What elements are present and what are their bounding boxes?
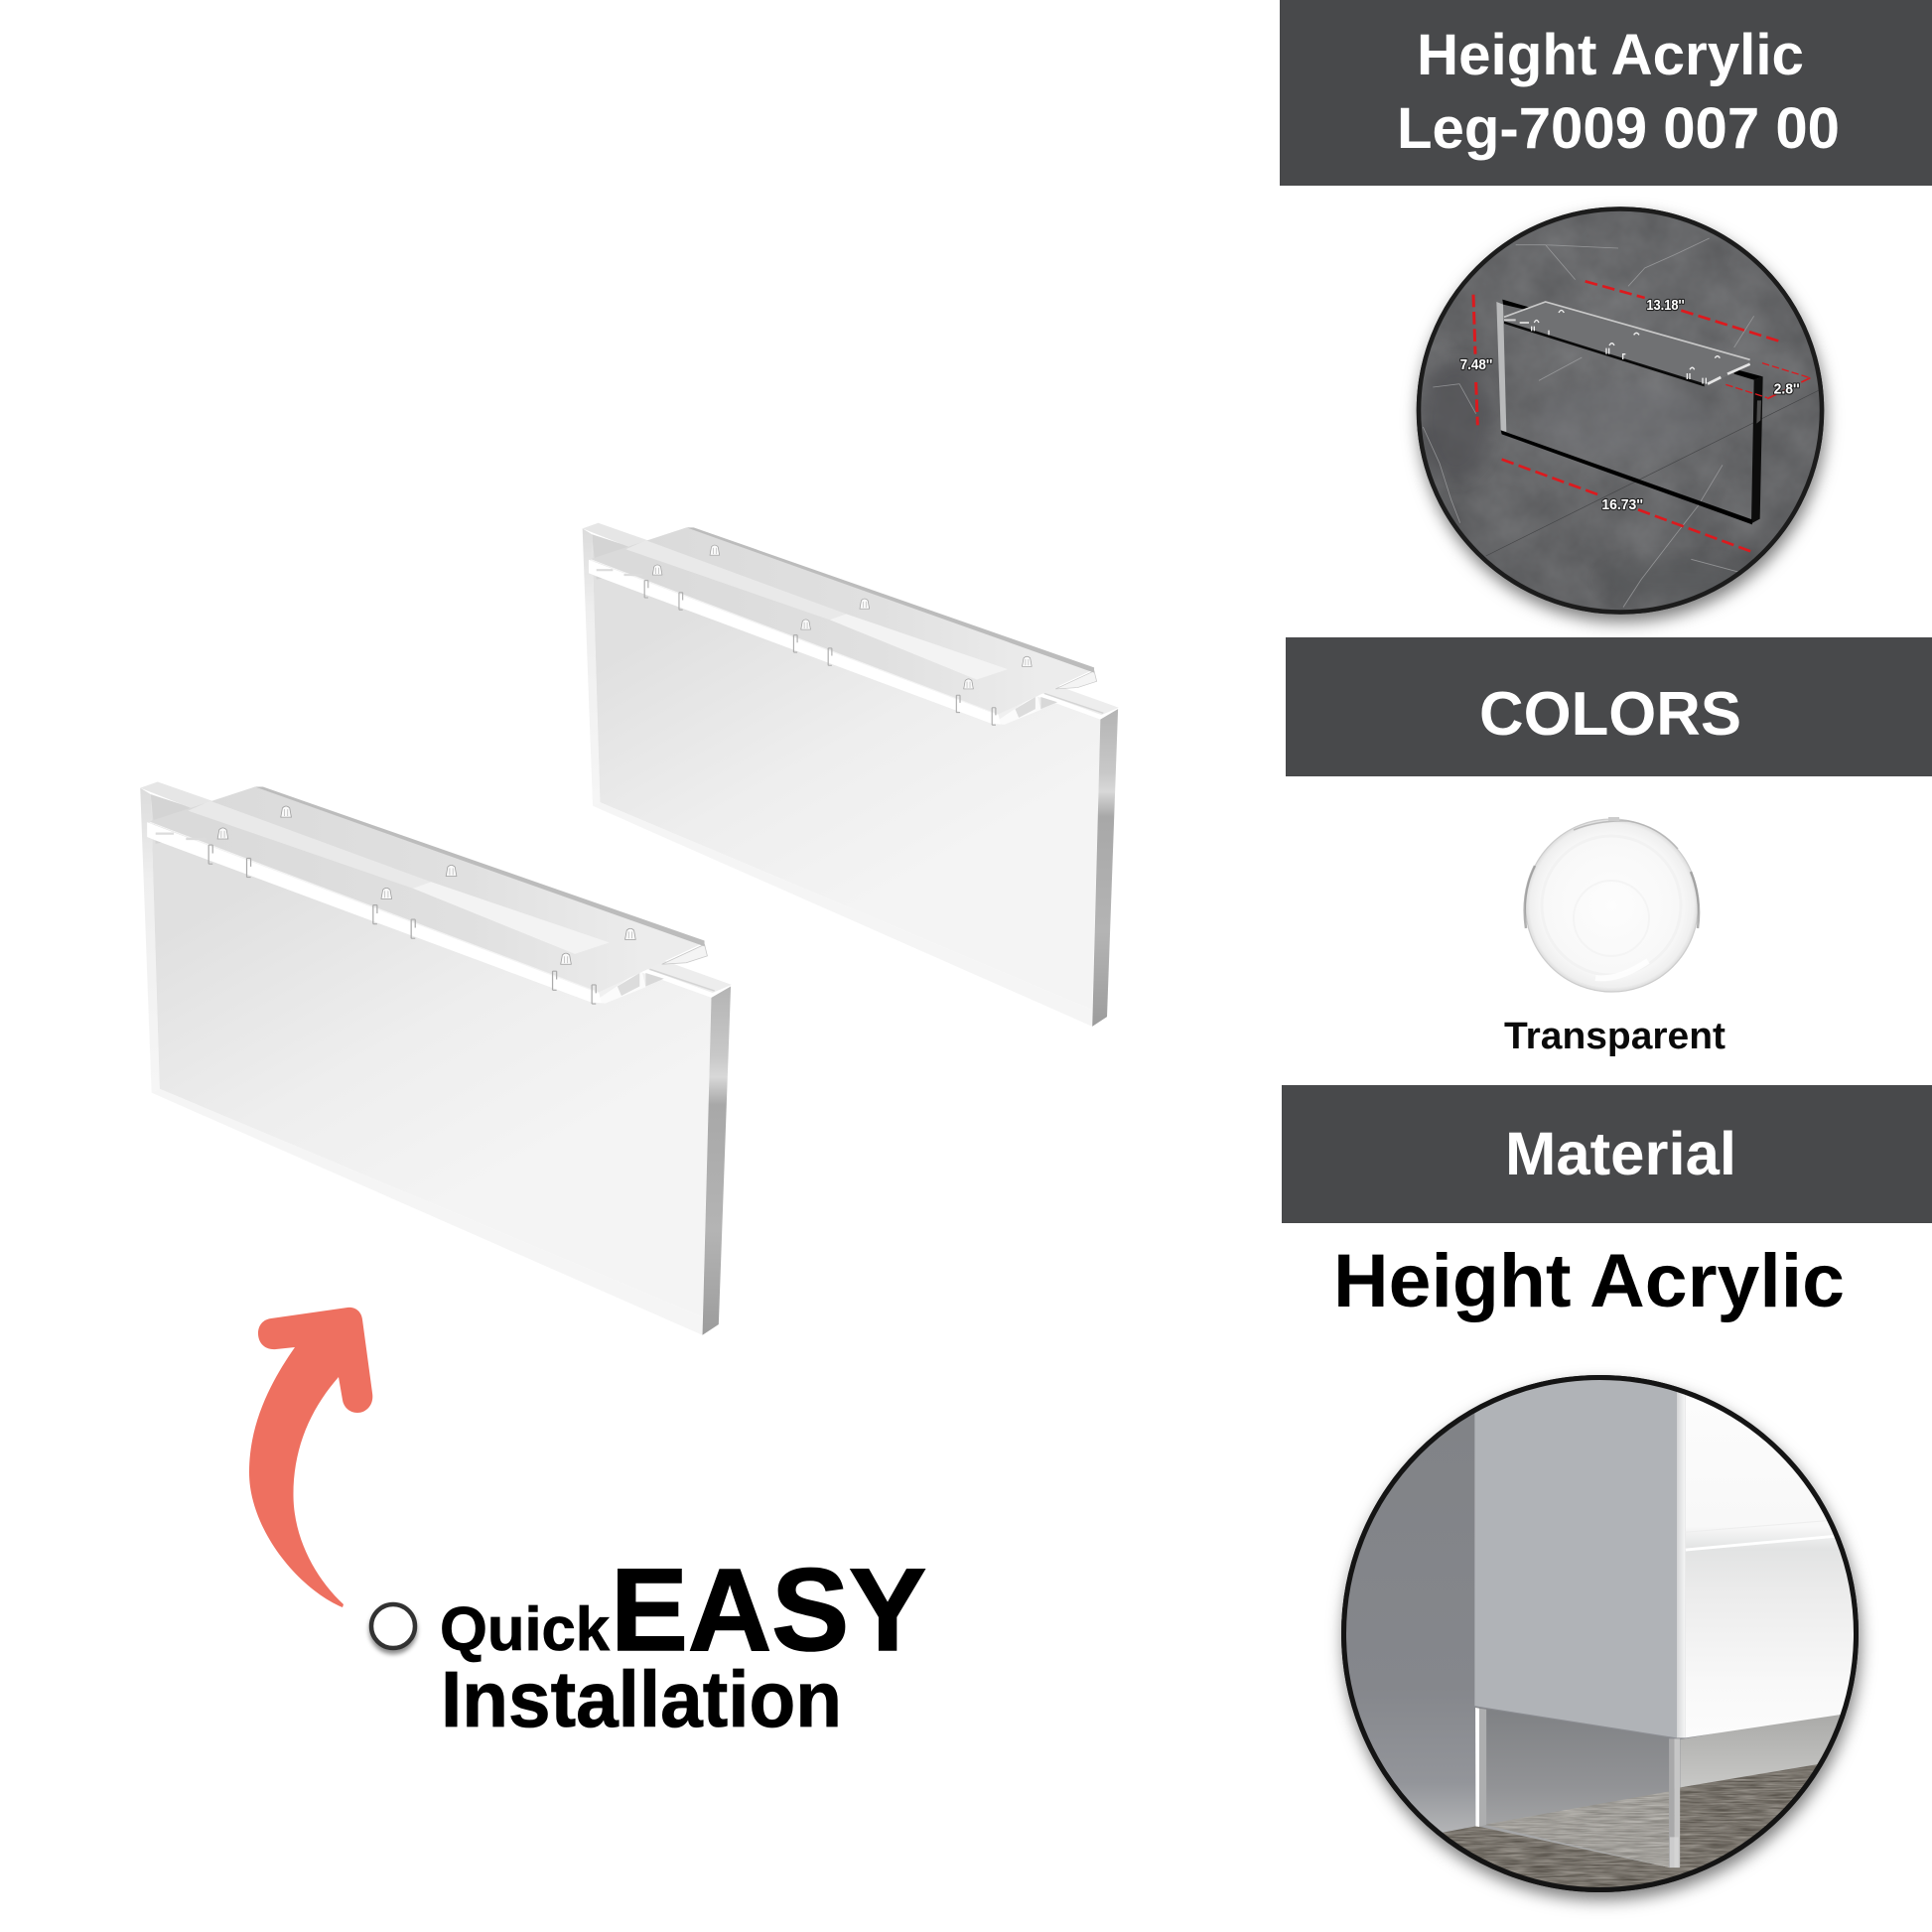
arrow: curved coral arrow pointing up [249, 1308, 372, 1607]
heading: material: Material [1505, 1120, 1736, 1187]
image: cabinet with acrylic leg in circle [1338, 1360, 1887, 1906]
heading: model number: Leg-7009 007 00 [1397, 96, 1840, 161]
cabinet front [1686, 1395, 1854, 1737]
dimension labels: 16.73'' [1601, 496, 1643, 513]
dimension labels [1460, 297, 1800, 513]
icon: transparent colour swatch bubble [1525, 817, 1699, 992]
icon: ring bullet [371, 1604, 415, 1648]
label: Quick: Quick [440, 1595, 611, 1664]
text: material name: Height Acrylic [1333, 1239, 1845, 1323]
acrylic leg [1478, 1708, 1670, 1867]
panel: title header [1280, 0, 1932, 186]
acrylic leg: front [140, 782, 732, 1335]
acrylic leg outline [1496, 300, 1763, 524]
label: transparent: Transparent [1504, 1016, 1725, 1057]
floor [1443, 1764, 1817, 1887]
dimension labels: 2.8'' [1774, 380, 1800, 397]
panel: material header [1282, 1085, 1932, 1223]
chart: dimension diagram in circle [1410, 202, 1830, 619]
panel: colors header [1286, 637, 1932, 776]
wall under cabinet [1680, 1715, 1841, 1787]
label: EASY: EASY [611, 1545, 926, 1676]
dimension labels: 13.18'' [1646, 297, 1685, 314]
cabinet side [1474, 1360, 1677, 1737]
label: Installation: Installation [441, 1655, 842, 1743]
acrylic leg: back [583, 523, 1119, 1027]
callout: quick easy installation [371, 1545, 926, 1743]
dimension lines [1473, 281, 1810, 552]
heading: colors: COLORS [1479, 680, 1741, 749]
heading: product name: Height Acrylic [1417, 23, 1804, 87]
dimension labels: 7.48'' [1460, 356, 1492, 373]
